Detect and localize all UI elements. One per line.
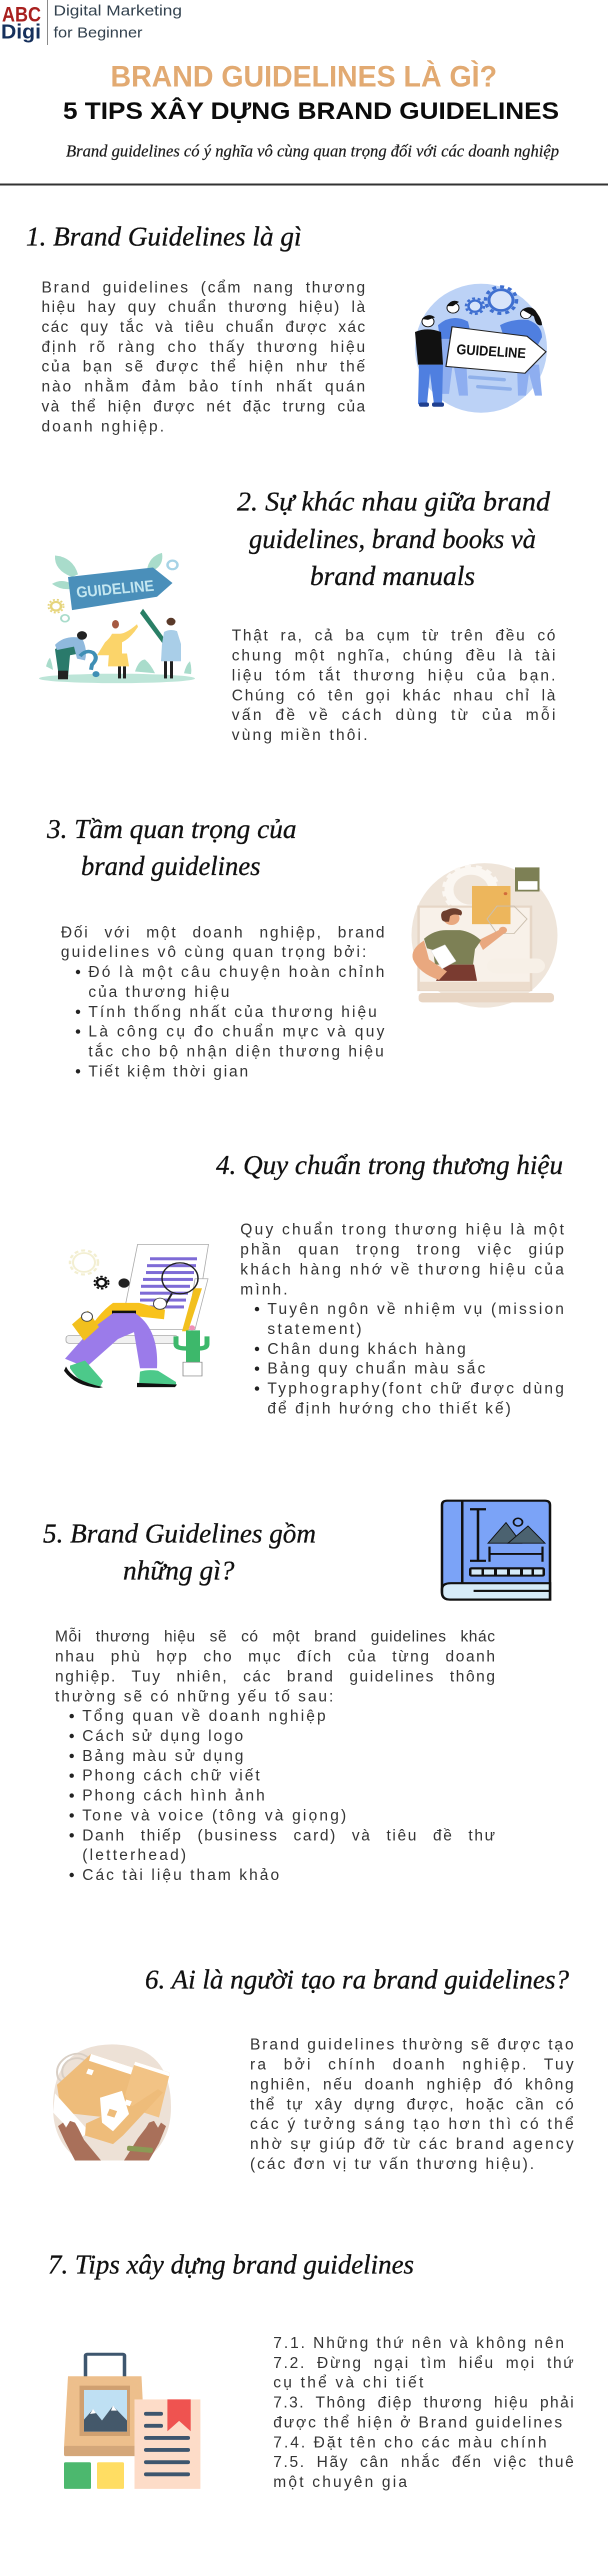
text block: section 5	[55, 1629, 495, 1884]
text block: section 2: chung một nghĩa, chúng đều là tài	[232, 648, 555, 664]
text block: section 7: được thể hiện ở Brand guidelines	[273, 2414, 562, 2431]
logo: ABC Digi: ABC	[2, 4, 41, 26]
title: 5 TIPS XÂY DỰNG BRAND GUIDELINES	[63, 97, 559, 125]
text block: section 6: các ý tưởng sáng tạo hơn thì có thể	[250, 2116, 574, 2133]
text block: section 3: của thương hiệu	[88, 984, 229, 1001]
illustration: people under guideline sign	[39, 553, 195, 683]
illustration: woman on laptop screen	[412, 863, 558, 1008]
text block: section 6	[250, 2037, 574, 2173]
illustration: people under guideline sign: GUIDELINE	[75, 577, 155, 601]
panel: section 5	[43, 1501, 550, 1884]
heading: section 6: 6. Ai là người tạo ra brand guidelines?	[145, 1964, 570, 1994]
text block: section 7: 7.5. Hãy cân nhắc đến việc thuê	[273, 2454, 574, 2471]
illustration: team holding guideline board	[415, 284, 547, 413]
text block: section 6: (các đơn vị tư vấn thương hiệu).	[250, 2156, 534, 2173]
text block: section 7: cụ thể và chi tiết	[273, 2375, 424, 2392]
heading: section 5: 5. Brand Guidelines gồm	[43, 1518, 316, 1548]
heading: section 7: 7. Tips xây dựng brand guidelines	[48, 2249, 414, 2279]
text block: section 6: nghiên, nếu doanh nghiệp đó không	[250, 2076, 574, 2093]
heading: section 4: 4. Quy chuẩn trong thương hiệu	[216, 1150, 563, 1180]
text block: section 7	[273, 2335, 574, 2491]
text block: section 5: nhau phù hợp cho mục đích của từng doanh	[55, 1648, 495, 1666]
text block: section 4: để định hướng cho thiết kế)	[267, 1400, 511, 1417]
text block: section 4: Quy chuẩn trong thương hiệu là một	[240, 1222, 565, 1239]
title: BRAND GUIDELINES LÀ GÌ?	[110, 60, 497, 94]
heading: section 3	[46, 814, 296, 881]
text block: section 2: vùng miền thôi.	[232, 727, 368, 744]
text block: section 5: Phong cách hình ảnh	[82, 1788, 265, 1805]
heading: section 2: brand manuals	[310, 561, 475, 591]
text block: section 5: Danh thiếp (business card) và tiêu đề thư	[82, 1827, 495, 1844]
text block: section 6: ra bởi chính doanh nghiệp. Tuy	[250, 2056, 574, 2074]
text block: section 5: Bảng màu sử dụng	[82, 1748, 243, 1765]
panel: section 7	[48, 2249, 574, 2491]
text block: section 5: Cách sử dụng logo	[82, 1728, 243, 1745]
text block: section 7: 7.4. Đặt tên cho các màu chính	[273, 2434, 547, 2451]
text block: section 6: Brand guidelines thường sẽ được tạo	[250, 2037, 574, 2054]
panel: section 6	[53, 1964, 574, 2173]
panel: section 4	[64, 1150, 565, 1417]
panel: section 2	[39, 486, 556, 744]
logo: ABC Digi: Digi	[1, 21, 41, 43]
title	[63, 60, 559, 125]
text block: section 7: 7.2. Đừng ngại tìm hiểu mọi thứ	[273, 2355, 574, 2372]
text block: section 7: 7.3. Thông điệp thương hiệu phải	[273, 2395, 574, 2412]
text block: section 1: hiệu hay quy chuẩn thương hiệu) là	[42, 299, 365, 316]
text block: section 6: nhờ sự giúp đỡ từ các brand agency	[250, 2136, 574, 2153]
text block: section 4	[240, 1222, 565, 1417]
text block: section 2: vấn đề về cách dùng từ của mỗi	[232, 707, 555, 724]
text block: section 2: Chúng có tên gọi khác nhau chỉ là	[232, 687, 556, 704]
text block: section 5: nghiệp. Tuy nhiên, các brand guidelines thông	[55, 1668, 495, 1685]
text block: section 1: của bạn sẽ được thể hiện như thế	[42, 359, 365, 376]
icon: blueprint book	[442, 1501, 550, 1600]
text block: section 1: và thể hiện được nét đặc trưng của	[42, 398, 365, 416]
text block: section 3: tắc cho bộ nhận diện thương hiệu	[88, 1044, 384, 1060]
text block: section 4: Chân dung khách hàng	[267, 1341, 466, 1358]
text block: section 2	[232, 628, 556, 744]
text block: section 2: liệu tóm tắt thương hiệu của bạn.	[232, 667, 555, 684]
logo: ABC Digi	[1, 0, 182, 45]
text block: section 4: Typhography(font chữ được dùng	[267, 1381, 564, 1398]
text block: section 6: thể tự xây dựng được, hoặc cần có	[250, 2096, 574, 2113]
text block: section 4: phần quan trọng trong việc giúp	[240, 1242, 564, 1258]
text block: section 1: doanh nghiệp.	[42, 418, 164, 435]
text block: section 3: Đối với một doanh nghiệp, brand	[61, 924, 385, 941]
text block: section 5: Các tài liệu tham khảo	[82, 1867, 279, 1884]
text block: section 5: Mỗi thương hiệu sẽ có một brand guidelines khác	[55, 1629, 495, 1646]
text block: section 3: guidelines vô cùng quan trọng bởi:	[61, 944, 366, 961]
text block: section 4: Tuyên ngôn về nhiệm vụ (mission	[267, 1301, 564, 1318]
heading: section 2	[237, 486, 551, 591]
text block: section 3: Đó là một câu chuyện hoàn chỉnh	[88, 964, 384, 981]
text block: section 1: Brand guidelines (cẩm nang thương	[42, 279, 365, 296]
heading: section 5	[43, 1518, 316, 1585]
logo: ABC Digi: for Beginner	[54, 24, 143, 41]
text block: section 5: Tone và voice (tông và giọng)	[82, 1807, 346, 1824]
panel: section 1	[26, 222, 547, 435]
subtitle: Brand guidelines có ý nghĩa vô cùng quan trọng đối với các doanh nghiệp	[66, 142, 559, 161]
text block: section 4: mình.	[240, 1281, 288, 1298]
heading: section 1: 1. Brand Guidelines là gì	[26, 222, 302, 252]
text block: section 1: định rõ ràng cho thấy thương hiệu	[42, 339, 365, 356]
illustration: team holding guideline board: GUIDELINE	[456, 342, 526, 362]
illustration: hands with stationery	[53, 2044, 171, 2160]
heading: section 3: 3. Tầm quan trọng của	[46, 814, 296, 844]
logo: ABC Digi: Digital Marketing	[54, 3, 182, 20]
text block: section 7: 7.1. Những thứ nên và không nên	[273, 2335, 564, 2352]
text block: section 7: một chuyên gia	[273, 2474, 407, 2491]
heading: section 2: 2. Sự khác nhau giữa brand	[237, 486, 551, 516]
heading: section 3: brand guidelines	[81, 851, 260, 881]
text block: section 3: Tiết kiệm thời gian	[88, 1063, 248, 1080]
illustration: person with magnifier and documents	[64, 1244, 208, 1388]
text block: section 1: các quy tắc và tiêu chuẩn được xác	[42, 319, 365, 336]
text block: section 1: nào nhằm đảm bảo tính nhất quán	[42, 379, 365, 396]
text block: section 5: thường sẽ có những yếu tố sau:	[55, 1688, 333, 1705]
text block: section 5: Tổng quan về doanh nghiệp	[82, 1708, 326, 1725]
panel: section 3	[46, 814, 557, 1080]
text block: section 1	[42, 279, 365, 435]
text block: section 4: Bảng quy chuẩn màu sắc	[267, 1361, 485, 1378]
text block: section 5: (letterhead)	[82, 1847, 186, 1864]
text block: section 3	[61, 924, 385, 1080]
text block: section 4: khách hàng nhớ về thương hiệu của	[240, 1261, 564, 1278]
text block: section 3: Tính thống nhất của thương hiệu	[88, 1004, 377, 1021]
heading: section 2: guidelines, brand books và	[249, 524, 536, 554]
text block: section 2: Thật ra, cả ba cụm từ trên đều có	[232, 628, 555, 645]
text block: section 3: Là công cụ đo chuẩn mực và quy	[88, 1024, 385, 1041]
heading: section 5: những gì?	[123, 1555, 235, 1585]
text block: section 4: statement)	[267, 1321, 362, 1338]
illustration: bag with photo, document and swatches	[64, 2354, 200, 2489]
text block: section 5: Phong cách chữ viết	[82, 1768, 260, 1785]
